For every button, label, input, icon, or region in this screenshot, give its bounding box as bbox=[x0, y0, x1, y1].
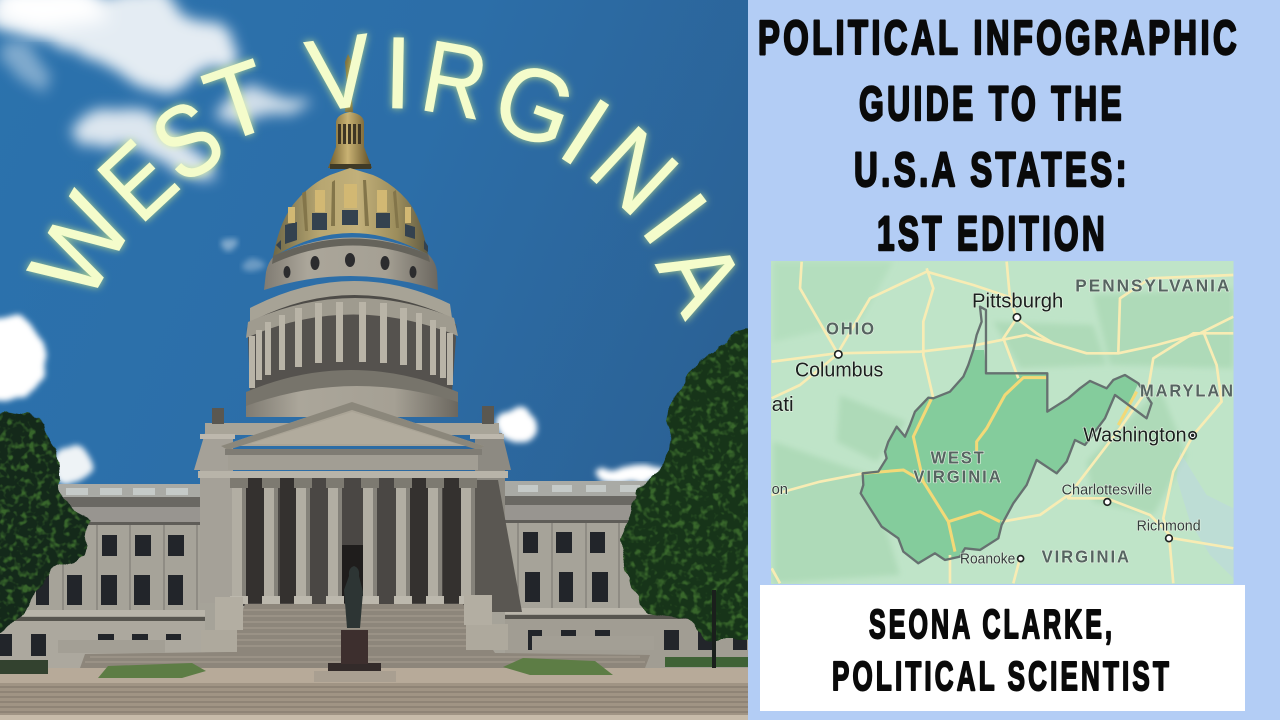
map labels: ati bbox=[772, 394, 794, 416]
panel: capitol photograph bbox=[0, 0, 766, 720]
side piers bbox=[194, 433, 233, 525]
map labels: VIRGINIA bbox=[1042, 546, 1131, 566]
map of West Virginia bbox=[771, 261, 1235, 584]
map labels: Richmond bbox=[1137, 519, 1201, 535]
central portico bbox=[194, 402, 522, 612]
curved title: West Virginia: V bbox=[300, 13, 380, 134]
heading: guide title: 1ST EDITION bbox=[877, 208, 1108, 261]
entablature bbox=[225, 449, 482, 455]
columns bbox=[232, 482, 474, 600]
heading: guide title bbox=[758, 12, 1240, 261]
heading: guide title: GUIDE TO THE bbox=[859, 78, 1125, 131]
curved title: West Virginia: A bbox=[635, 222, 766, 333]
curved title: West Virginia: S bbox=[134, 77, 242, 205]
curved title: West Virginia: I bbox=[543, 76, 628, 187]
sky bbox=[0, 0, 748, 484]
colonnade drum bbox=[246, 281, 458, 417]
map labels: MARYLAN bbox=[1140, 380, 1235, 400]
balustrades bbox=[58, 484, 200, 497]
tree left bbox=[0, 408, 92, 632]
map base bbox=[771, 261, 1234, 584]
curved title: West Virginia: R bbox=[414, 19, 495, 142]
highlighted highways bbox=[863, 378, 1137, 552]
curved title: West Virginia: I bbox=[621, 173, 729, 264]
windows bbox=[0, 532, 747, 656]
dome balustrade bbox=[250, 281, 452, 322]
West Virginia border bbox=[861, 307, 1152, 563]
roads bbox=[772, 262, 1233, 583]
garden beds bbox=[0, 657, 748, 678]
curved title: West Virginia: N bbox=[569, 106, 698, 237]
map labels: Charlottesville bbox=[1062, 482, 1152, 498]
map labels: PENNSYLVANIA bbox=[1075, 276, 1231, 296]
map labels: Roanoke bbox=[960, 551, 1015, 567]
map labels: Pittsburgh bbox=[972, 291, 1063, 313]
curved title: West Virginia: T bbox=[192, 38, 285, 165]
pediment bbox=[233, 417, 475, 446]
curved title: West Virginia: G bbox=[480, 39, 589, 172]
author card bbox=[760, 585, 1245, 711]
terrain patches bbox=[773, 262, 1233, 583]
curved title: West Virginia: I bbox=[383, 16, 413, 130]
capitol wings bbox=[0, 481, 748, 669]
dome statue bbox=[345, 54, 353, 112]
portico interior bbox=[236, 476, 472, 606]
map labels: VIRGINIA bbox=[913, 466, 1003, 486]
panel: right background bbox=[748, 0, 1280, 720]
West Virginia fill bbox=[861, 350, 1138, 563]
grand staircase bbox=[58, 595, 654, 668]
gold dome bbox=[273, 168, 428, 257]
map labels bbox=[772, 276, 1235, 567]
map labels: Columbus bbox=[795, 359, 883, 381]
upper drum bbox=[264, 237, 438, 290]
water bbox=[1177, 452, 1233, 578]
curved title: West Virginia: E bbox=[78, 120, 198, 243]
tree right bbox=[620, 326, 760, 668]
map labels: on bbox=[772, 482, 788, 498]
pilaster lines bbox=[63, 523, 619, 610]
author name: SEONA CLARKE, bbox=[869, 601, 1115, 647]
statue monument bbox=[314, 566, 396, 682]
map labels: WEST bbox=[931, 448, 986, 468]
map labels: OHIO bbox=[826, 318, 876, 338]
capitol dome bbox=[246, 54, 458, 417]
clouds bbox=[0, 0, 665, 483]
heading: guide title: U.S.A STATES: bbox=[854, 144, 1130, 197]
curved title: West Virginia bbox=[22, 28, 740, 325]
curved title: West Virginia: W bbox=[7, 176, 154, 317]
map labels: Washington bbox=[1083, 425, 1187, 447]
forecourt and steps bbox=[0, 668, 748, 720]
lantern bbox=[328, 112, 372, 169]
city markers bbox=[835, 314, 1196, 562]
